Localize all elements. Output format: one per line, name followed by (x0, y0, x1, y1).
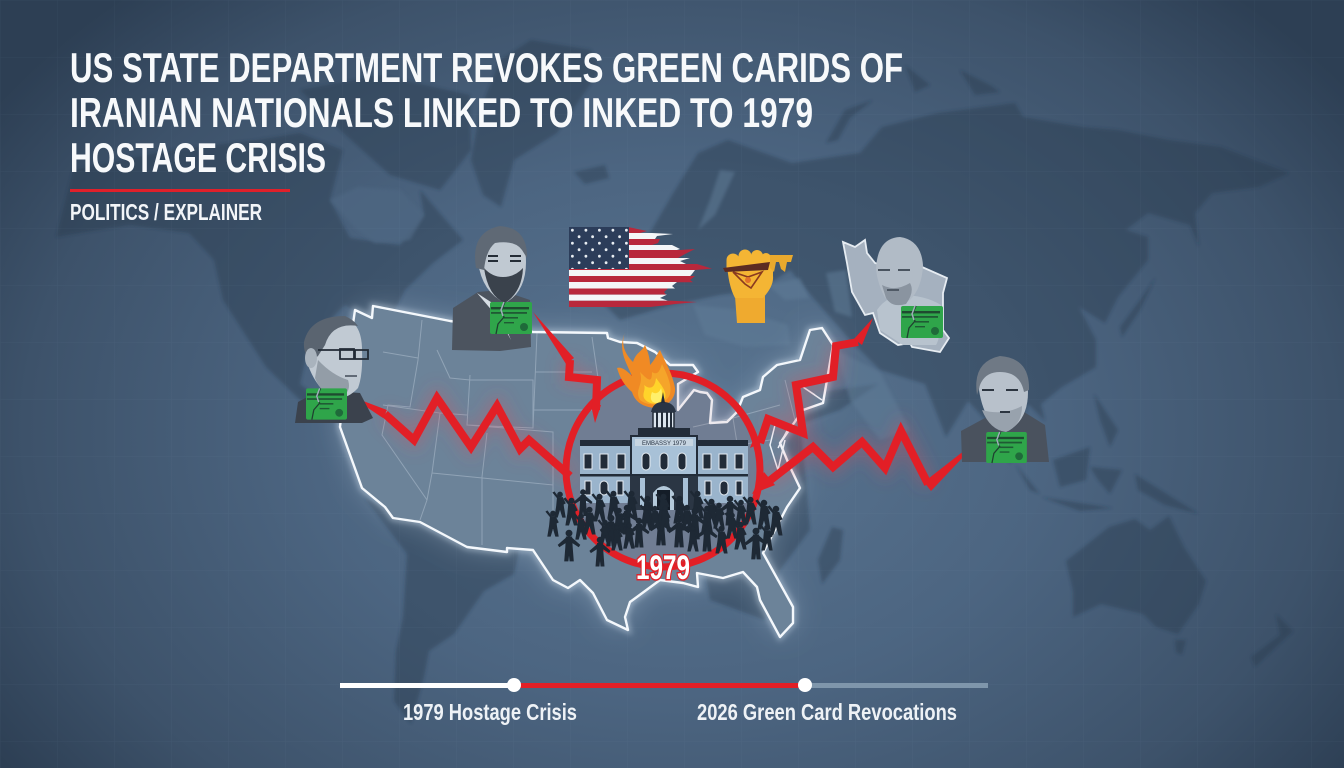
soft red glow behind the lightning lines (385, 346, 928, 484)
title (70, 44, 903, 181)
red ring around the embassy (566, 373, 760, 567)
protest crowd (546, 490, 782, 566)
timeline label 2026: 2026 Green Card Revocations (697, 699, 957, 725)
portrait: man over Iran silhouette with cracked green card (843, 237, 949, 352)
portrait: grey-haired man with cracked green card (961, 356, 1049, 463)
title: US STATE DEPARTMENT REVOKES GREEN CARIDS OF (70, 44, 903, 91)
subtitle: POLITICS / EXPLAINER (70, 199, 262, 225)
embassy building (580, 392, 748, 510)
portrait: bearded man with cracked green card (452, 226, 532, 351)
embassy building: EMBASSY 1979 (642, 441, 687, 447)
title: HOSTAGE CRISIS (70, 134, 326, 181)
torn US flag (569, 227, 712, 307)
lighter seas around Europe (693, 170, 910, 440)
portrait: man with glasses and cracked green card (295, 316, 373, 423)
timeline bar (340, 678, 988, 692)
USA map with glowing outline (340, 306, 833, 637)
lightning arrow from Iran portrait (750, 318, 873, 448)
year label 1979: 1979 (636, 549, 690, 587)
lightning arrow from left person (350, 396, 570, 476)
flame on the dome (617, 332, 675, 408)
lightning arrow from right person (752, 431, 983, 494)
title: IRANIAN NATIONALS LINKED TO INKED TO 1979 (70, 89, 813, 136)
lightning arrow from second person (533, 312, 601, 423)
title underline (70, 189, 290, 192)
Hudson Bay and inland waters (330, 187, 424, 243)
timeline label 1979: 1979 Hostage Crisis (403, 699, 577, 725)
raised fist holding a key (723, 250, 793, 323)
